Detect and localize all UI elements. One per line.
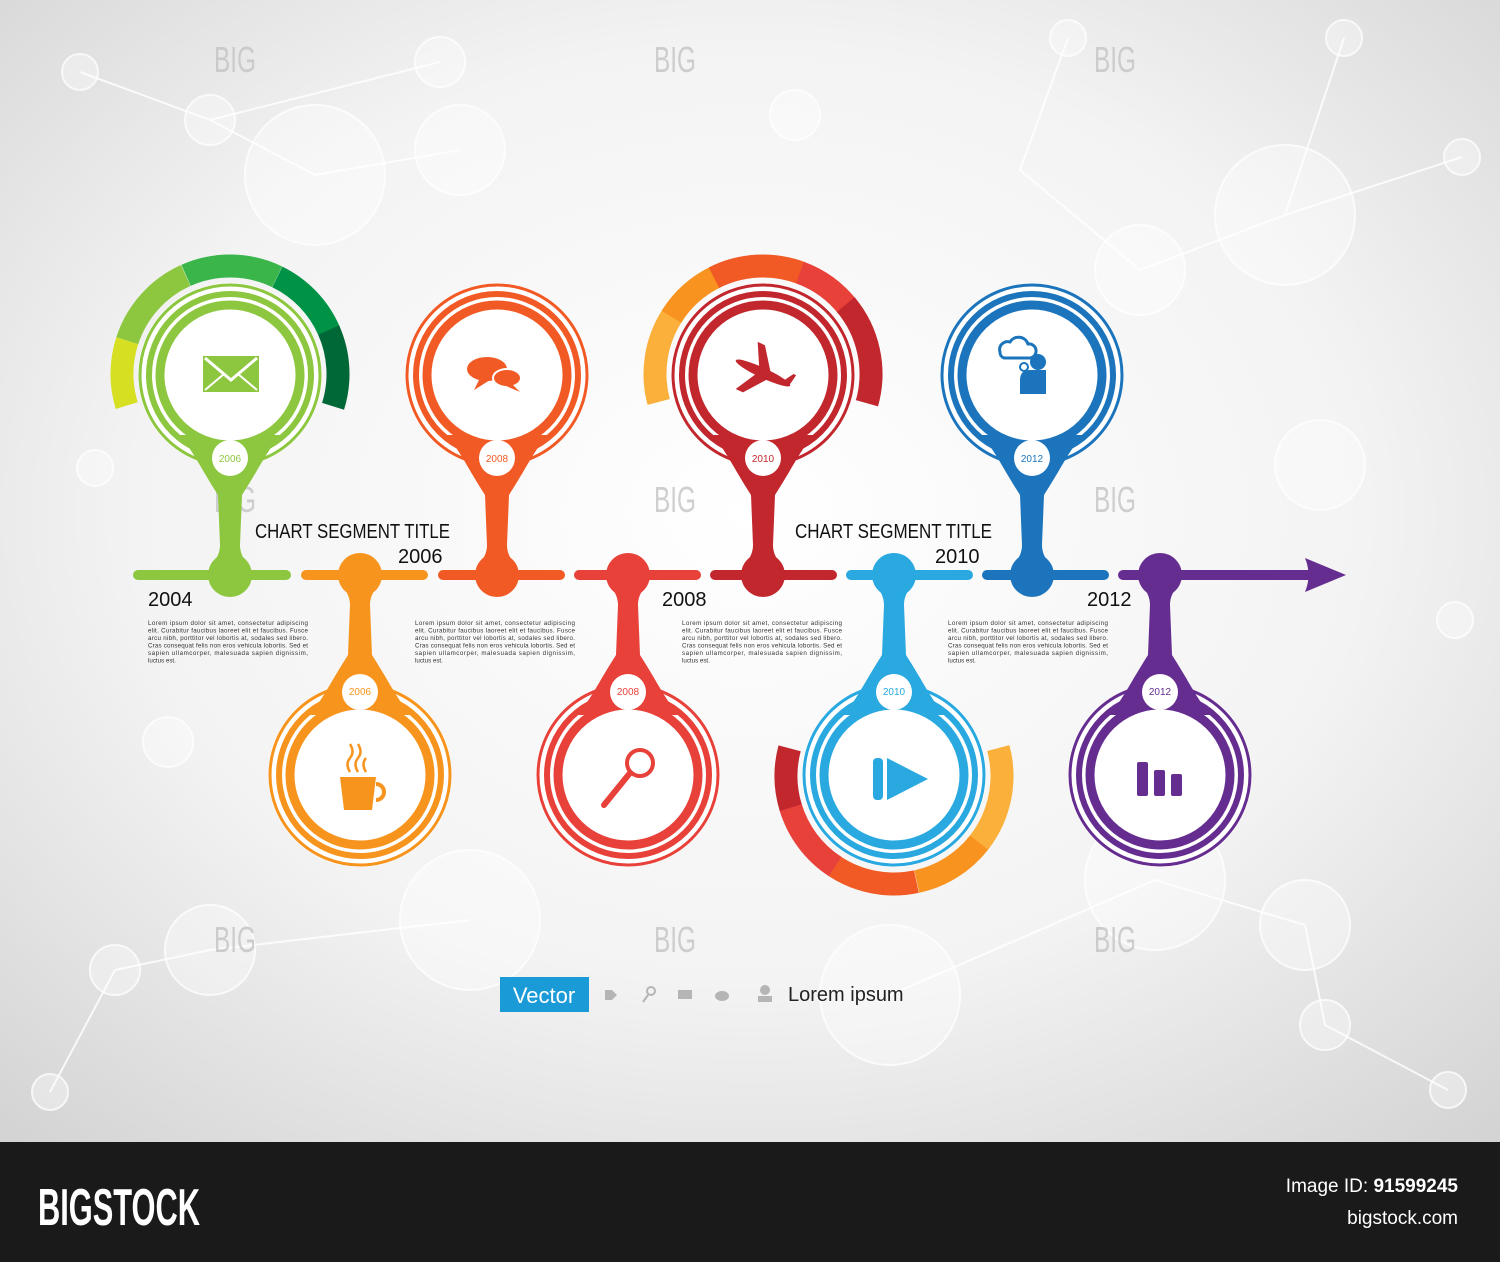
vector badge: Vector <box>513 983 575 1008</box>
icon: speech bubbles <box>467 357 521 392</box>
pin: crimson 2010 <box>671 283 855 597</box>
year labels: 2008 <box>662 589 706 611</box>
text blocks: luctus est. <box>682 658 710 664</box>
small gray icons <box>605 985 772 1002</box>
heading: chart segment title 2010: 2010 <box>935 546 980 568</box>
text blocks: elit. Curabitur faucibus laoreet elit et faucibus. Fusce <box>415 628 576 634</box>
footer bar: bigstock.com <box>1347 1208 1458 1229</box>
icon: bar chart <box>1137 762 1182 796</box>
heading: chart segment title 2006: 2006 <box>398 546 442 568</box>
text blocks: elit. Curabitur faucibus laoreet elit et faucibus. Fusce <box>948 628 1109 634</box>
vector badge <box>500 977 589 1012</box>
lorem ipsum label: Lorem ipsum <box>788 984 904 1006</box>
watermarks: BIG <box>1094 919 1136 960</box>
bubble years: 2010 <box>883 687 906 698</box>
bubble years: 2008 <box>486 454 509 465</box>
pin: orange 2008 <box>405 283 589 597</box>
text blocks: Cras consequat felis non eros vehicula lobortis. Sed et <box>415 642 575 650</box>
text blocks <box>148 620 1109 664</box>
pin: green 2006 <box>138 283 322 597</box>
pin: red 2008 down <box>536 553 720 867</box>
icon: magnifier <box>604 750 653 805</box>
text blocks: arcu nibh, porttitor vel lobortis at, sodales sed libero. <box>682 635 842 642</box>
watermarks: BIG <box>214 39 256 80</box>
text blocks: elit. Curabitur faucibus laoreet elit et faucibus. Fusce <box>682 628 843 634</box>
pin: purple 2012 down <box>1068 553 1252 867</box>
heading: chart segment title 2006: CHART SEGMENT TITLE <box>255 521 450 543</box>
watermarks: BIG <box>214 919 256 960</box>
text blocks: elit. Curabitur faucibus laoreet elit et faucibus. Fusce <box>148 628 309 634</box>
text blocks: luctus est. <box>948 658 976 664</box>
watermarks: BIG <box>1094 479 1136 520</box>
text blocks: Cras consequat felis non eros vehicula lobortis. Sed et <box>948 642 1108 650</box>
text blocks: arcu nibh, porttitor vel lobortis at, sodales sed libero. <box>148 635 308 642</box>
bubble years: 2006 <box>349 687 372 698</box>
timeline axis <box>133 558 1346 592</box>
bubble years: 2008 <box>617 687 640 698</box>
year labels <box>148 589 1132 611</box>
watermarks: BIG <box>1094 39 1136 80</box>
text blocks: Cras consequat felis non eros vehicula lobortis. Sed et <box>148 642 308 650</box>
text blocks: Lorem ipsum dolor sit amet, consectetur adipiscing <box>948 620 1109 627</box>
text blocks: luctus est. <box>415 658 443 664</box>
bubble years: 2012 <box>1149 687 1172 698</box>
text blocks: luctus est. <box>148 658 176 664</box>
text blocks: arcu nibh, porttitor vel lobortis at, sodales sed libero. <box>948 635 1108 642</box>
icon: person cloud <box>1000 337 1046 394</box>
text blocks: sapien ullamcorper, malesuada sapien dignissim, <box>415 650 575 657</box>
gauge: green <box>86 230 374 518</box>
icon: coffee cup <box>340 744 384 810</box>
gauge: crimson <box>611 222 915 526</box>
icon: play <box>873 758 928 800</box>
text blocks: Lorem ipsum dolor sit amet, consectetur adipiscing <box>682 620 843 627</box>
text blocks: sapien ullamcorper, malesuada sapien dignissim, <box>948 650 1108 657</box>
watermarks: BIG <box>214 479 256 520</box>
text blocks: sapien ullamcorper, malesuada sapien dignissim, <box>682 650 842 657</box>
text blocks: Lorem ipsum dolor sit amet, consectetur adipiscing <box>415 620 576 627</box>
watermarks: BIG <box>654 919 696 960</box>
heading: chart segment title 2006 <box>255 521 450 568</box>
pin: light blue 2010 down <box>802 553 986 867</box>
footer bar <box>0 1142 1500 1262</box>
text blocks: Cras consequat felis non eros vehicula lobortis. Sed et <box>682 642 842 650</box>
icon: envelope <box>203 356 259 392</box>
text blocks: Lorem ipsum dolor sit amet, consectetur adipiscing <box>148 620 309 627</box>
watermarks <box>214 39 1136 960</box>
footer bar: Image ID: 91599245 <box>1286 1176 1458 1197</box>
heading: chart segment title 2010: CHART SEGMENT TITLE <box>795 521 992 543</box>
watermarks: BIG <box>654 479 696 520</box>
pin: blue 2012 <box>940 283 1124 597</box>
text blocks: sapien ullamcorper, malesuada sapien dignissim, <box>148 650 308 657</box>
bubble years <box>219 454 1172 698</box>
year labels: 2012 <box>1087 589 1132 611</box>
bubble years: 2010 <box>752 454 775 465</box>
watermarks: BIG <box>654 39 696 80</box>
text blocks: arcu nibh, porttitor vel lobortis at, sodales sed libero. <box>415 635 575 642</box>
year labels: 2004 <box>148 589 192 611</box>
gauge: light blue <box>742 624 1046 928</box>
pin: orange 2006 down <box>268 553 452 867</box>
bubble years: 2012 <box>1021 454 1044 465</box>
bubble years: 2006 <box>219 454 242 465</box>
icon: airplane <box>725 337 802 410</box>
footer bar: BIGSTOCK <box>38 1179 200 1237</box>
heading: chart segment title 2010 <box>795 521 992 568</box>
